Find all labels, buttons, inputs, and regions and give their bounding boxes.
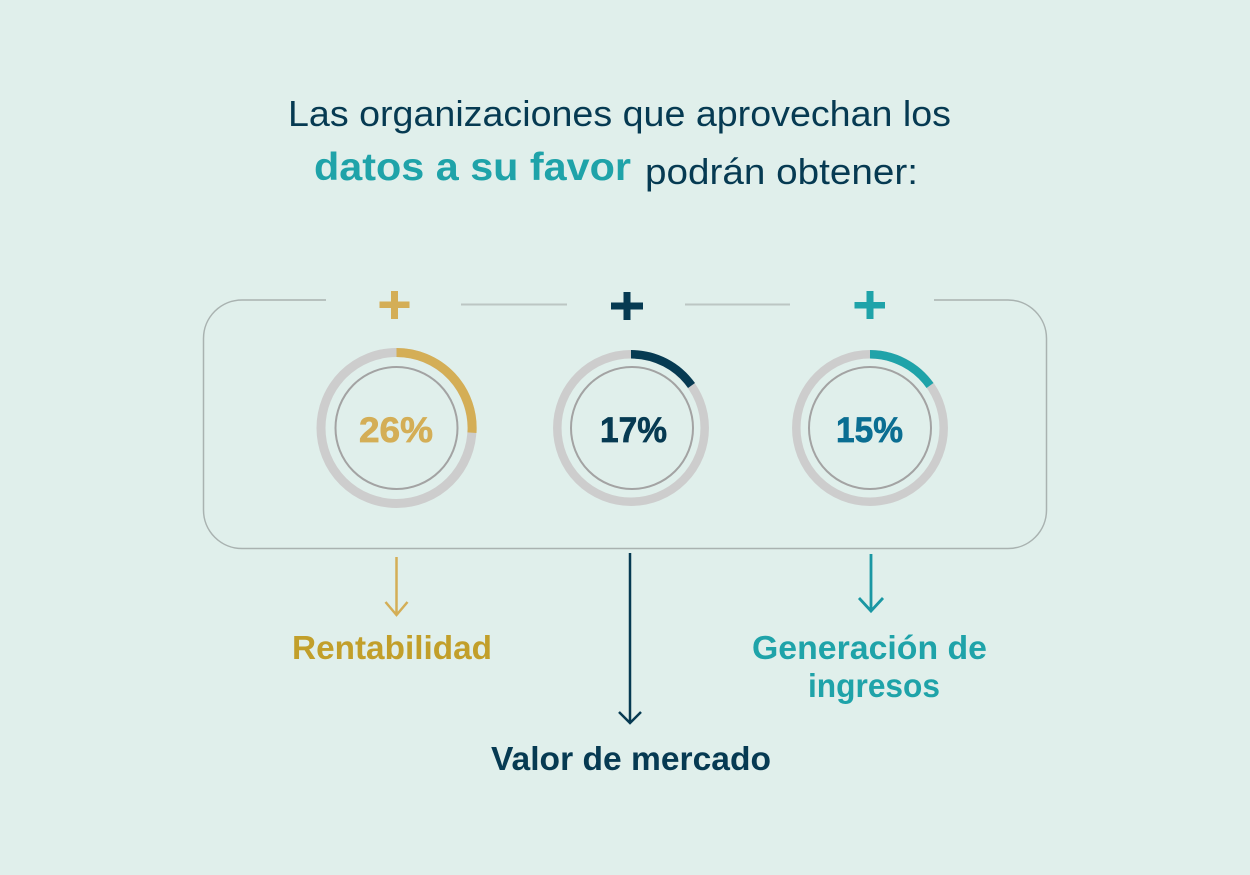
label: Valor de mercado: Valor de mercado <box>491 740 771 777</box>
chart: 17% donut: 17% <box>600 411 667 450</box>
title: Las organizaciones que aprovechan los <box>288 93 951 134</box>
label: Generación de ingresos <box>752 629 987 704</box>
arrow: teal <box>859 554 883 611</box>
chart: 15% donut <box>796 354 944 502</box>
arrow: navy <box>619 553 641 723</box>
chart: 17% donut <box>557 354 705 502</box>
rounded frame <box>204 300 1046 548</box>
title: datos a su favor <box>314 146 631 189</box>
chart: 15% donut: 15% <box>836 411 903 450</box>
label: Generación de ingresos: Generación de <box>752 629 987 666</box>
label: Rentabilidad: Rentabilidad <box>292 629 492 666</box>
arrow: gold <box>386 557 408 615</box>
title <box>288 93 951 192</box>
icon: plus navy <box>611 292 643 320</box>
chart: 26% donut: 26% <box>359 411 433 450</box>
title: podrán obtener: <box>645 151 918 192</box>
icon: plus teal <box>854 291 885 319</box>
label: Generación de ingresos: ingresos <box>808 667 940 704</box>
chart: 26% donut <box>321 352 472 504</box>
icon: plus gold <box>380 291 410 319</box>
